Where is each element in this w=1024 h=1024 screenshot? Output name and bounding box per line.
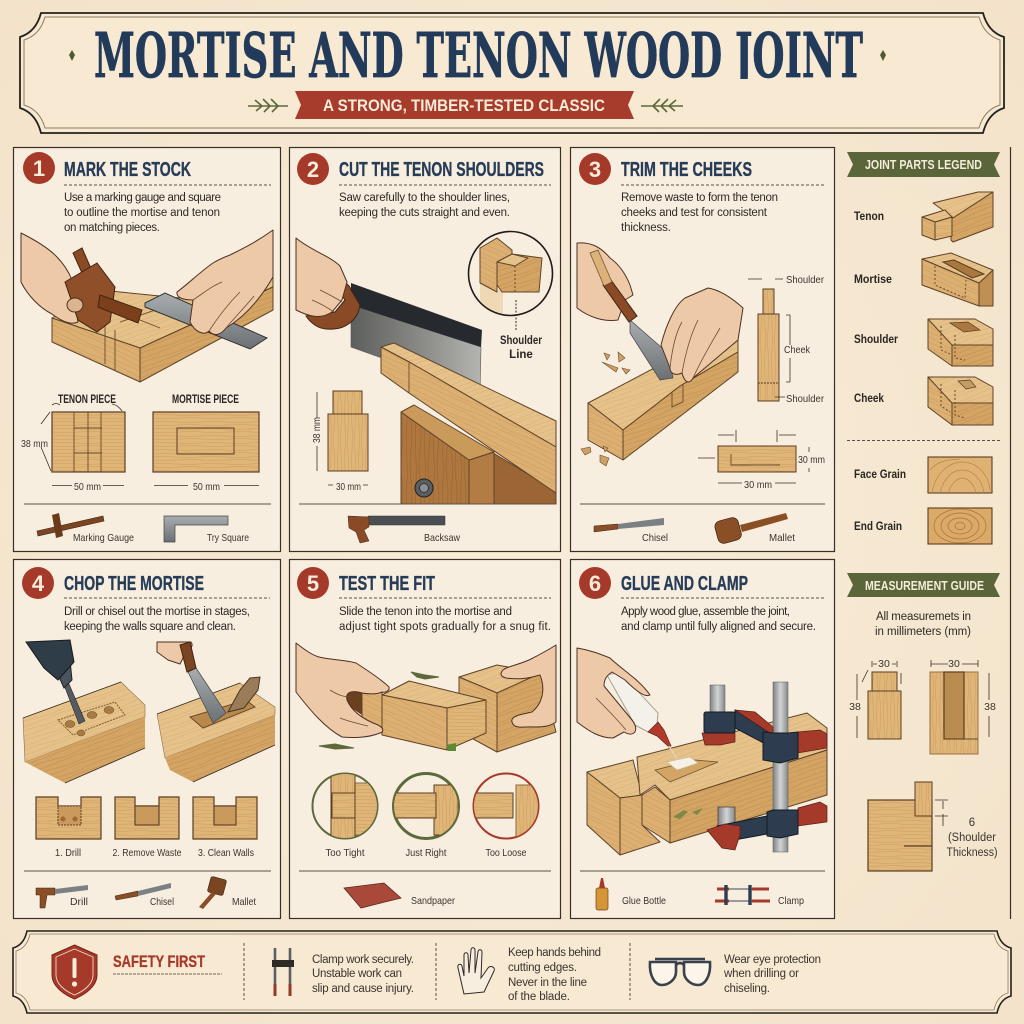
step 1 instructions: on matching pieces.	[64, 222, 160, 234]
detail callout: shoulder line: Shoulder	[500, 335, 542, 347]
icon: right diamond	[880, 50, 886, 61]
illustration: chiseling	[157, 642, 275, 782]
icon: right sprig	[641, 99, 683, 112]
legend: cheek	[854, 377, 993, 425]
tool: mallet	[714, 513, 788, 545]
step 3 instructions: cheeks and test for consistent	[621, 207, 768, 219]
illustration: trimming with chisel	[577, 243, 743, 466]
icon: safety glasses	[650, 959, 710, 985]
label: sandpaper: Sandpaper	[411, 895, 455, 907]
panel: measurement guide	[847, 573, 1000, 871]
diagram: tenon end view: 30 mm	[798, 454, 825, 466]
step number 6: 6	[589, 571, 601, 596]
diagram: tenon end view	[698, 430, 825, 491]
diagram: tenon measurement: 30	[878, 658, 890, 670]
step number 4: 4	[32, 571, 45, 596]
step 2 instructions: keeping the cuts straight and even.	[339, 207, 510, 219]
step number 2: 2	[307, 157, 319, 182]
tool: chisel	[594, 518, 664, 532]
label: glue bottle: Glue Bottle	[622, 895, 666, 907]
tool: sandpaper	[344, 883, 401, 908]
diagram: tenon side view	[748, 274, 824, 405]
detail callout: shoulder line: Line	[509, 349, 533, 361]
legend: mortise: Mortise	[854, 272, 892, 286]
step number 5: 5	[307, 571, 319, 596]
tip: keep hands behind: of the blade.	[508, 991, 570, 1003]
tool: marking gauge	[37, 513, 104, 538]
tool: try square	[164, 516, 228, 542]
panel: step 2 cut the tenon shoulders	[290, 148, 560, 552]
step 6 instructions: and clamp until fully aligned and secure.	[621, 621, 816, 633]
tip: keep hands behind: Never in the line	[508, 977, 587, 989]
illustration: sawing the shoulder	[296, 238, 556, 504]
label: too tight: Too Tight	[326, 847, 365, 859]
icon: hand	[458, 948, 494, 994]
legend: mortise	[854, 253, 993, 306]
diagram: clean walls stage	[193, 797, 257, 839]
label: too loose: Too Loose	[486, 847, 527, 859]
tip: clamp work: Unstable work can	[312, 968, 402, 980]
diagram: tenon piece: 38 mm	[21, 438, 48, 450]
diagram: too loose	[472, 774, 540, 838]
diagram: mortise measurement: 38	[984, 701, 996, 713]
illustration: drilling	[23, 640, 145, 783]
step 6 instructions: Apply wood glue, assemble the joint,	[621, 606, 790, 618]
step 5 heading: TEST THE FIT	[339, 573, 435, 595]
legend: cheek: Cheek	[854, 391, 884, 405]
label: 2 remove waste: 2. Remove Waste	[112, 847, 182, 859]
tip: eye protection: chiseling.	[724, 983, 770, 995]
step 1 heading: MARK THE STOCK	[64, 159, 191, 181]
measurement note: All measuremets in	[876, 611, 971, 623]
diagram: tenon end view: 30 mm	[744, 479, 772, 491]
illustration: marking the stock with gauge	[21, 230, 273, 382]
step number 5	[297, 567, 329, 599]
step 4 instructions: keeping the walls square and clean.	[64, 621, 236, 633]
legend: end grain: End Grain	[854, 519, 902, 533]
legend: shoulder: Shoulder	[854, 332, 898, 346]
step 5 instructions: Slide the tenon into the mortise and	[339, 606, 512, 618]
tip: eye protection: when drilling or	[723, 968, 799, 980]
panel: step 1 mark the stock	[14, 148, 280, 552]
step number 1	[23, 152, 55, 184]
panel: step 4 chop the mortise	[14, 560, 280, 918]
tool: glue bottle	[596, 878, 608, 910]
step number 4	[22, 567, 54, 599]
diagram: tenon side view: Shoulder	[786, 393, 824, 405]
label: marking gauge: Marking Gauge	[73, 532, 134, 544]
label: 3 clean walls: 3. Clean Walls	[198, 847, 254, 859]
illustration: glue and clamp	[577, 648, 827, 855]
label: chisel: Chisel	[642, 532, 668, 544]
header plaque	[20, 13, 1004, 133]
step 4 instructions: Drill or chisel out the mortise in stages,	[64, 606, 250, 618]
diagram: tenon dimensions	[311, 391, 368, 493]
diagram: tenon piece	[21, 404, 125, 493]
subtitle ribbon: A STRONG, TIMBER-TESTED CLASSIC	[323, 97, 605, 115]
illustration: test fit	[296, 643, 556, 752]
label: clamp: Clamp	[778, 895, 804, 907]
step number 2	[297, 153, 329, 185]
panel: step 6 glue and clamp	[570, 560, 834, 918]
step number 3	[579, 153, 611, 185]
tool: clamp	[715, 885, 770, 905]
measurement banner	[847, 573, 1000, 597]
legend: end grain	[854, 508, 992, 544]
tool: drill	[36, 885, 88, 908]
step 1 instructions: to outline the mortise and tenon	[64, 207, 220, 219]
panel: safety first footer	[13, 931, 1011, 1013]
step 2 instructions: Saw carefully to the shoulder lines,	[339, 192, 510, 204]
detail callout: shoulder line	[468, 232, 552, 361]
safety heading: SAFETY FIRST	[113, 952, 205, 971]
diagram: shoulder thickness: 6	[969, 817, 975, 829]
step 4 heading: CHOP THE MORTISE	[64, 573, 204, 595]
diagram: tenon dimensions: 38 mm	[311, 417, 323, 443]
measurement note: in millimeters (mm)	[875, 626, 971, 638]
label: mallet: Mallet	[769, 532, 795, 544]
diagram: tenon side view: Shoulder	[786, 274, 824, 286]
step 2 heading: CUT THE TENON SHOULDERS	[339, 159, 544, 181]
measurement banner: MEASUREMENT GUIDE	[865, 578, 984, 593]
label: 1 drill: 1. Drill	[55, 847, 81, 859]
tool: backsaw	[348, 516, 445, 543]
step 3 instructions: Remove waste to form the tenon	[621, 192, 778, 204]
label: try square: Try Square	[207, 532, 249, 544]
icon: clamp	[272, 948, 294, 996]
diagram: shoulder thickness	[868, 782, 998, 871]
step 3 heading: TRIM THE CHEEKS	[621, 159, 752, 181]
diagram: shoulder thickness: (Shoulder	[948, 832, 996, 844]
panel: step 3 trim the cheeks	[570, 148, 834, 552]
tool: chisel	[115, 883, 171, 900]
legend banner	[847, 152, 1000, 177]
tip: keep hands behind: Keep hands behind	[508, 947, 601, 959]
step number 1: 1	[33, 156, 45, 181]
tip: eye protection: Wear eye protection	[724, 954, 821, 966]
diagram: shoulder thickness: Thickness)	[946, 847, 998, 859]
icon: left diamond	[69, 50, 75, 61]
panel: step 5 test the fit	[290, 560, 560, 918]
panel: joint parts legend	[847, 147, 1010, 919]
label: drill: Drill	[70, 896, 88, 908]
label: mallet: Mallet	[232, 896, 256, 908]
diagram: mortise measurement	[930, 658, 996, 754]
subtitle ribbon	[295, 91, 634, 119]
icon: left sprig	[248, 99, 288, 112]
legend: tenon: Tenon	[854, 209, 884, 223]
legend banner: JOINT PARTS LEGEND	[865, 157, 982, 172]
label: mortise piece: MORTISE PIECE	[172, 394, 239, 406]
legend: tenon	[854, 192, 993, 242]
label: tenon piece: TENON PIECE	[58, 394, 116, 406]
legend: face grain: Face Grain	[854, 467, 906, 481]
diagram: remove waste stage	[115, 797, 179, 839]
step 5 instructions: adjust tight spots gradually for a snug fit.	[339, 621, 551, 633]
tip: clamp work: Clamp work securely.	[312, 954, 414, 966]
diagram: drill stage	[36, 797, 101, 839]
diagram: too tight	[312, 770, 379, 844]
tip: keep hands behind: cutting edges.	[508, 962, 577, 974]
icon: warning shield	[52, 945, 97, 999]
diagram: tenon piece: 50 mm	[74, 481, 101, 493]
legend: face grain	[854, 457, 992, 493]
diagram: tenon measurement	[849, 658, 901, 739]
label: just right: Just Right	[406, 847, 447, 859]
step 6 heading: GLUE AND CLAMP	[621, 573, 748, 595]
tip: clamp work: slip and cause injury.	[312, 983, 414, 995]
diagram: mortise measurement: 30	[948, 658, 960, 670]
step number 3: 3	[589, 157, 601, 182]
tool: mallet	[199, 876, 227, 909]
label: chisel: Chisel	[150, 896, 174, 908]
diagram: mortise piece	[153, 412, 259, 493]
step 1 instructions: Use a marking gauge and square	[64, 192, 221, 204]
diagram: just right	[392, 774, 458, 838]
diagram: tenon measurement: 38	[849, 701, 861, 713]
diagram: mortise piece: 50 mm	[193, 481, 220, 493]
diagram: tenon side view: Cheek	[784, 344, 811, 356]
legend: shoulder	[854, 319, 993, 366]
diagram: tenon dimensions: 30 mm	[336, 481, 361, 493]
step number 6	[579, 567, 611, 599]
step 3 instructions: thickness.	[621, 222, 671, 234]
label: backsaw: Backsaw	[424, 532, 460, 544]
